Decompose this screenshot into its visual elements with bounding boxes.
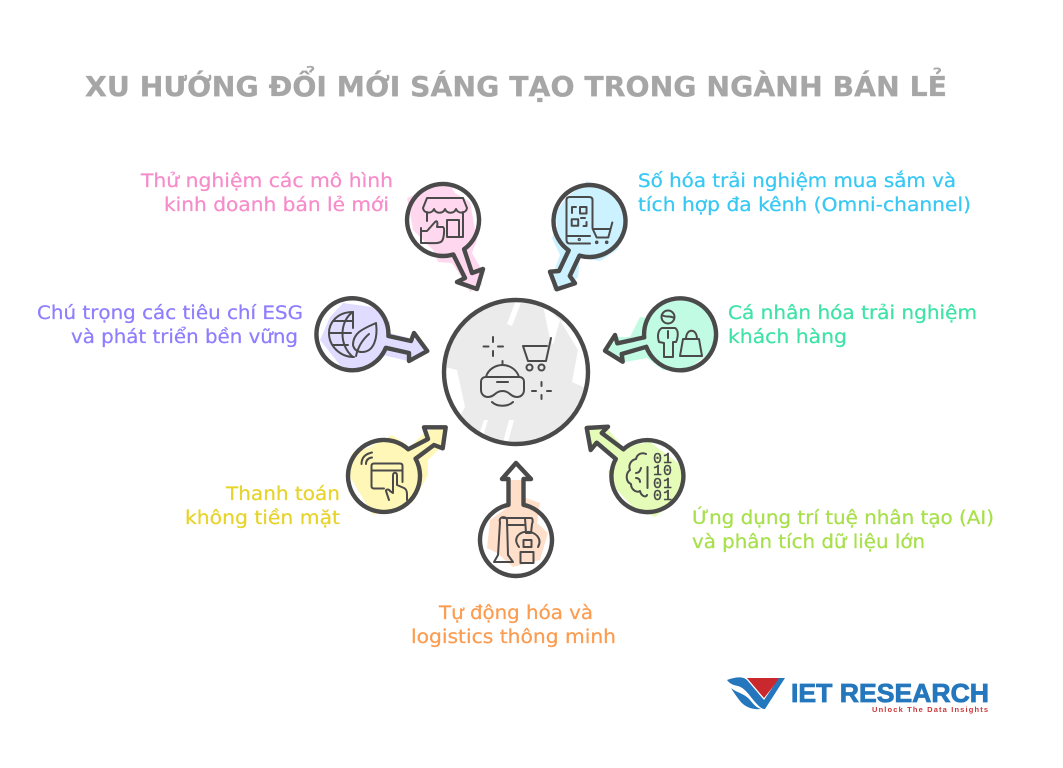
logo: Viet Research: Unlock The Data Insights <box>872 705 988 714</box>
icon: cart and VR headset <box>481 337 551 406</box>
icon: globe and leaf <box>329 312 376 357</box>
label: omni-channel digital: tích hợp đa kênh (Omni-channel) <box>638 195 971 216</box>
label: AI and big data: và phân tích dữ liệu lớn <box>692 532 925 553</box>
node: cashless payment (yellow) <box>348 425 446 515</box>
label: new retail models <box>140 171 393 216</box>
node: automation and logistics (orange) <box>480 463 552 576</box>
label: cashless payment <box>185 484 340 529</box>
icon: card tap <box>362 452 407 500</box>
label: personalized experience: Cá nhân hóa trải nghiệm <box>728 303 977 324</box>
node: AI and big data (lime) <box>587 425 685 517</box>
label: ESG and sustainability: Chú trọng các tiêu chí ESG <box>37 303 303 324</box>
icon: robotic arm <box>494 517 539 563</box>
icon: brain and binary digits: 01 <box>653 451 672 468</box>
central hub: retail innovation <box>444 300 590 446</box>
node: omni-channel digital (blue) <box>550 181 628 291</box>
label: omni-channel digital <box>638 171 971 216</box>
label: personalized experience <box>728 303 977 348</box>
label: cashless payment: Thanh toán <box>225 484 340 505</box>
label: new retail models: Thử nghiệm các mô hình <box>140 171 393 192</box>
label: ESG and sustainability <box>37 303 303 348</box>
node: new retail models (pink) <box>407 181 483 292</box>
logo: Viet Research: IET RESEARCH <box>791 678 989 708</box>
label: personalized experience: khách hàng <box>728 327 847 348</box>
label: cashless payment: không tiền mặt <box>185 508 340 529</box>
label: omni-channel digital: Số hóa trải nghiệm mua sắm và <box>638 171 956 192</box>
title: XU HƯỚNG ĐỔI MỚI SÁNG TẠO TRONG NGÀNH BÁN LẺ <box>85 63 947 103</box>
icon: brain and binary digits: 10 <box>653 463 672 480</box>
logo: Viet Research <box>727 677 989 714</box>
icon: phone with QR and cart <box>566 197 612 244</box>
label: automation and logistics: Tự động hóa và <box>438 603 593 624</box>
label: automation and logistics: logistics thông minh <box>411 627 616 648</box>
label: new retail models: kinh doanh bán lẻ mới <box>164 195 389 216</box>
node: personalized experience (mint) <box>605 298 717 370</box>
icon: brain and binary digits <box>627 451 672 505</box>
node: ESG and sustainability (purple) <box>316 298 427 373</box>
icon: customer with shopping bag <box>658 310 702 357</box>
label: ESG and sustainability: và phát triển bền vững <box>71 327 298 348</box>
icon: brain and binary digits: 01 <box>653 476 672 493</box>
label: AI and big data <box>692 507 994 553</box>
icon: store and thumbs up <box>421 198 467 243</box>
label: AI and big data: Ứng dụng trí tuệ nhân tạo (AI) <box>692 507 994 529</box>
label: automation and logistics <box>411 603 616 648</box>
icon: brain and binary digits: 01 <box>653 488 672 505</box>
